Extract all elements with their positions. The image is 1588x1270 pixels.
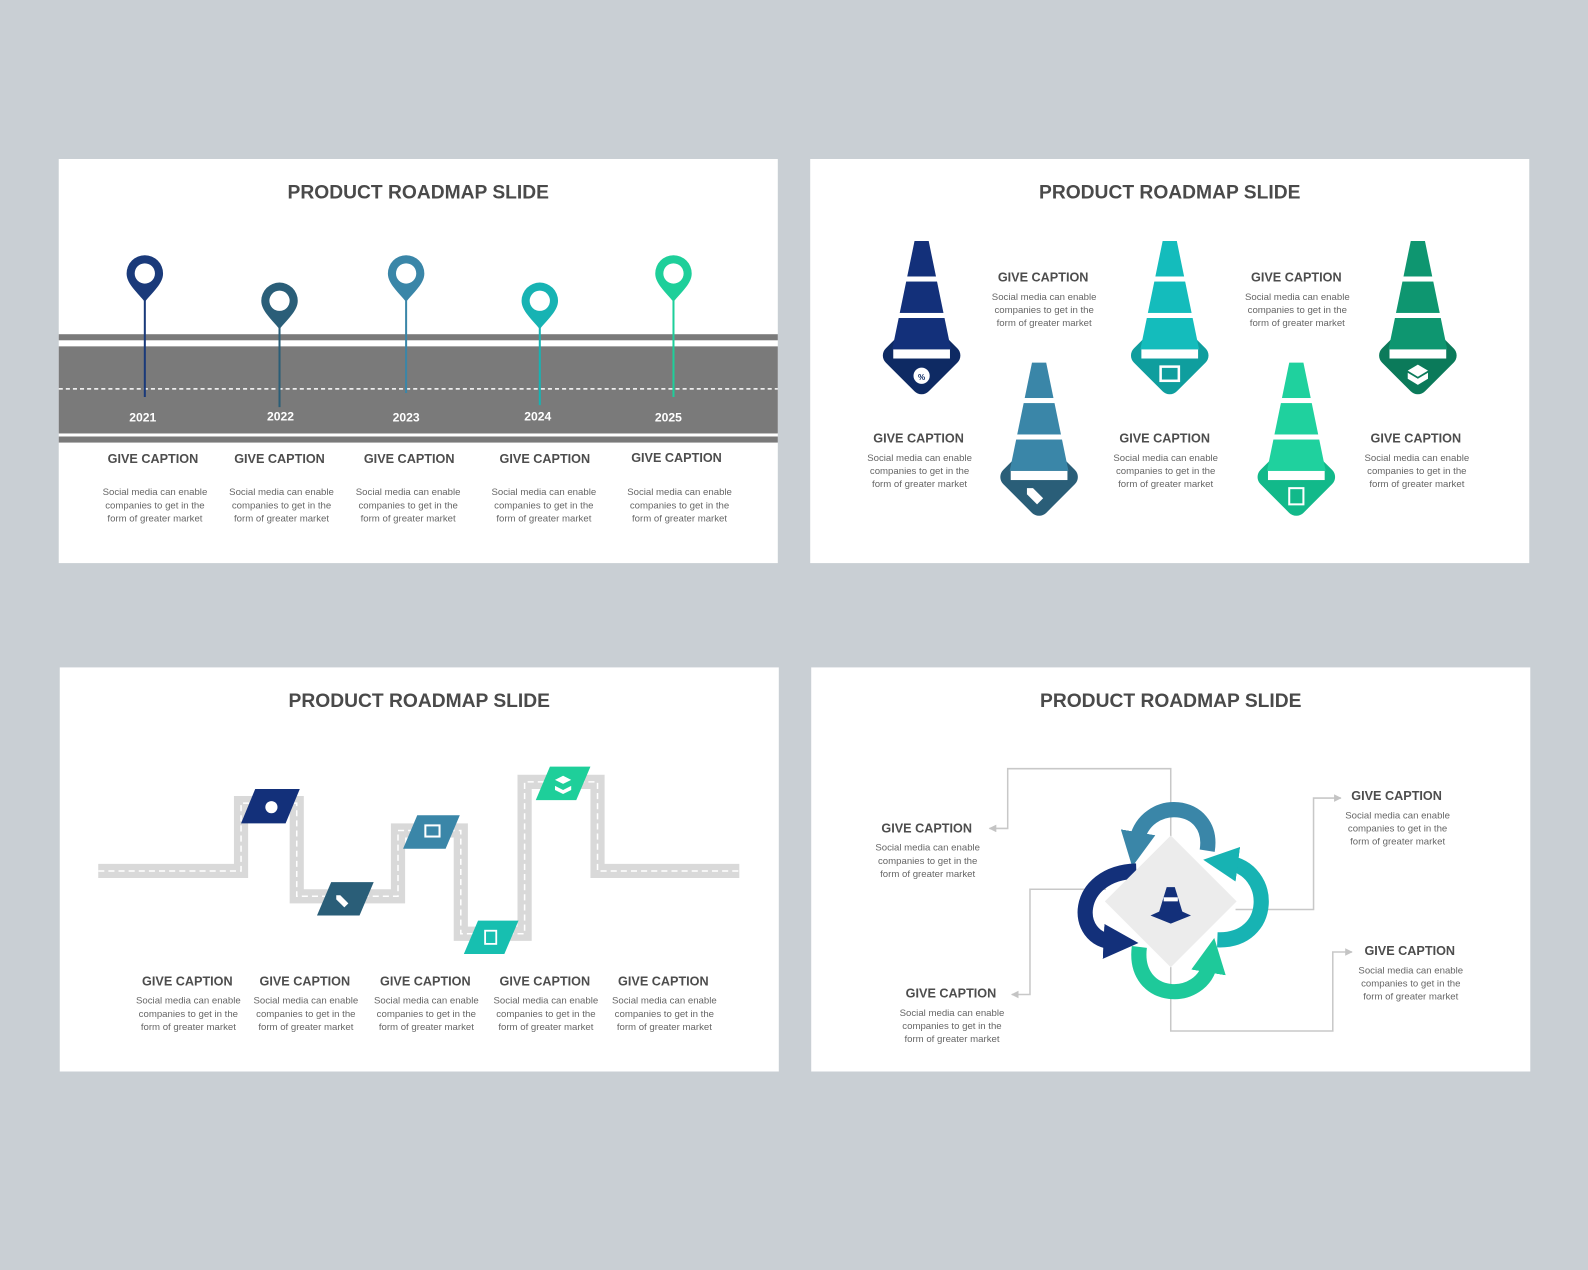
cone captions: Social media can enable (867, 453, 972, 464)
cone captions: companies to get in the (1367, 466, 1467, 477)
captions row: form of greater market (379, 1022, 474, 1033)
cone captions: companies to get in the (1116, 466, 1215, 477)
captions row: Social media can enable (136, 996, 241, 1007)
cone captions: GIVE CAPTION (1371, 432, 1461, 446)
captions row: companies to get in the (358, 500, 458, 511)
pin 2024: 2024 (524, 409, 552, 423)
captions row: form of greater market (496, 514, 592, 525)
captions row: companies to get in the (496, 1009, 596, 1020)
captions row: companies to get in the (615, 1009, 714, 1020)
cycle captions: companies to get in the (1361, 978, 1460, 989)
icon: boxes (536, 767, 590, 800)
captions row: companies to get in the (139, 1009, 238, 1020)
captions row: companies to get in the (630, 500, 729, 511)
title: PRODUCT ROADMAP SLIDE (289, 691, 550, 712)
cycle captions: Social media can enable (900, 1008, 1004, 1019)
connector lines (989, 769, 1352, 1031)
captions row: GIVE CAPTION (618, 974, 709, 988)
cone captions: GIVE CAPTION (998, 271, 1088, 285)
cone captions: form of greater market (1250, 318, 1345, 329)
cone captions: Social media can enable (1364, 453, 1469, 464)
title: PRODUCT ROADMAP SLIDE (1040, 691, 1302, 712)
title: PRODUCT ROADMAP SLIDE (288, 183, 549, 204)
captions row: Social media can enable (374, 996, 479, 1007)
captions row: form of greater market (632, 514, 727, 525)
cycle captions: form of greater market (1350, 837, 1445, 848)
icon: bag (464, 921, 519, 954)
captions row: Social media can enable (612, 996, 717, 1007)
cycle captions: companies to get in the (1348, 823, 1447, 834)
captions row: Social media can enable (103, 487, 207, 498)
pin 2021: 2021 (129, 410, 157, 424)
pin 2022: 2022 (267, 409, 294, 423)
icon: store (403, 815, 460, 849)
cone 1: % (918, 373, 925, 382)
panel: timeline road (59, 159, 778, 563)
captions row: GIVE CAPTION (631, 451, 722, 465)
captions row: companies to get in the (232, 500, 331, 511)
cycle captions: companies to get in the (902, 1021, 1002, 1032)
cycle captions: companies to get in the (878, 856, 977, 867)
cone captions: Social media can enable (1245, 292, 1350, 303)
captions row: Social media can enable (627, 487, 732, 498)
captions row: GIVE CAPTION (108, 452, 198, 466)
captions row: GIVE CAPTION (260, 974, 350, 988)
captions row: Social media can enable (491, 487, 596, 498)
captions row: GIVE CAPTION (500, 974, 590, 988)
captions row: GIVE CAPTION (142, 974, 233, 988)
pin 2025 (655, 255, 692, 424)
cycle captions: GIVE CAPTION (1351, 789, 1442, 803)
center diamond with cone icon (1105, 835, 1237, 967)
pin 2023: 2023 (393, 410, 420, 424)
icon: money bag (241, 789, 300, 823)
cone captions: companies to get in the (994, 305, 1094, 316)
captions row: companies to get in the (377, 1009, 476, 1020)
pin 2025: 2025 (655, 410, 682, 424)
road path (98, 782, 739, 934)
captions row: companies to get in the (256, 1009, 356, 1020)
cone 3 (1127, 241, 1213, 398)
captions row: form of greater market (258, 1022, 354, 1033)
cycle captions: Social media can enable (1345, 810, 1450, 821)
cone 1 (879, 241, 965, 398)
captions row: Social media can enable (356, 487, 460, 498)
pin 2024 (522, 283, 558, 423)
captions row: companies to get in the (494, 500, 594, 511)
cycle captions: form of greater market (904, 1034, 1000, 1045)
captions row: GIVE CAPTION (380, 974, 471, 988)
captions row: form of greater market (234, 514, 329, 525)
cycle arrows (1085, 810, 1261, 992)
cone captions: form of greater market (1369, 479, 1465, 490)
captions row: form of greater market (361, 514, 456, 525)
captions row (136, 974, 717, 1033)
captions row: GIVE CAPTION (500, 452, 590, 466)
captions row: Social media can enable (494, 996, 598, 1007)
cone captions (867, 271, 1469, 490)
cone captions: companies to get in the (1248, 305, 1347, 316)
cone captions: form of greater market (1118, 479, 1214, 490)
icon: tag (317, 882, 374, 916)
cone captions: companies to get in the (870, 466, 969, 477)
captions row: form of greater market (107, 514, 203, 525)
captions row: companies to get in the (105, 500, 205, 511)
cone captions: GIVE CAPTION (1119, 432, 1210, 446)
cycle captions: form of greater market (880, 869, 976, 880)
cone captions: form of greater market (872, 479, 967, 490)
captions row: form of greater market (498, 1022, 594, 1033)
pin 2023 (388, 255, 424, 424)
cone captions: GIVE CAPTION (1251, 271, 1342, 285)
captions row (103, 451, 732, 525)
road (59, 334, 778, 443)
cone captions: Social media can enable (992, 292, 1097, 303)
panel: cycle (811, 667, 1530, 1071)
captions row: Social media can enable (229, 487, 334, 498)
pin 2021 (127, 255, 163, 424)
cycle captions: GIVE CAPTION (1364, 944, 1455, 958)
captions row: form of greater market (617, 1022, 712, 1033)
panel: cones (810, 159, 1529, 563)
captions row: form of greater market (141, 1022, 236, 1033)
cycle captions (875, 789, 1463, 1045)
title: PRODUCT ROADMAP SLIDE (1039, 183, 1301, 204)
cone captions: GIVE CAPTION (873, 432, 964, 446)
cone 4 (1253, 363, 1339, 520)
cycle captions: Social media can enable (1358, 965, 1463, 976)
pin 2022 (261, 283, 298, 423)
cone captions: Social media can enable (1113, 453, 1218, 464)
cone 2 (996, 363, 1082, 520)
cycle captions: GIVE CAPTION (881, 821, 972, 835)
captions row: Social media can enable (253, 996, 358, 1007)
captions row: GIVE CAPTION (234, 452, 325, 466)
cycle captions: GIVE CAPTION (906, 987, 996, 1001)
cycle captions: Social media can enable (875, 843, 980, 854)
cone captions: form of greater market (997, 318, 1092, 329)
cycle captions: form of greater market (1363, 992, 1459, 1003)
captions row: GIVE CAPTION (364, 452, 454, 466)
cone 5 (1375, 241, 1461, 398)
panel: winding road (60, 667, 779, 1071)
